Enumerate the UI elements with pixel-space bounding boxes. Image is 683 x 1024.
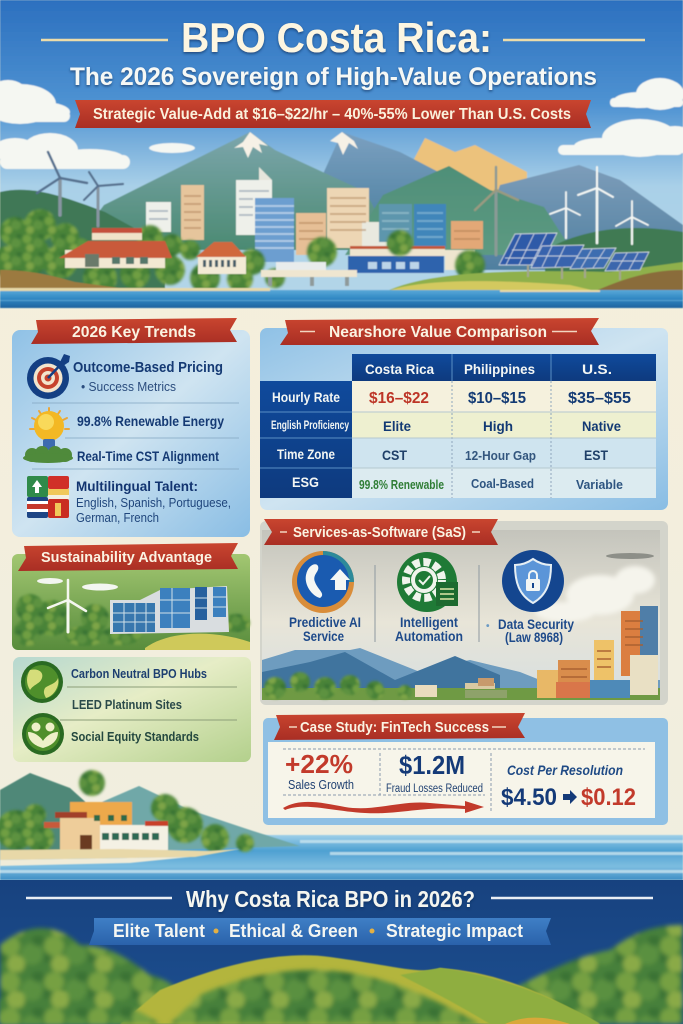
icon: green globe xyxy=(21,661,63,703)
heading: case study: Case Study: FinTech Success xyxy=(300,719,489,736)
icon: light bulb xyxy=(23,408,73,463)
row: english proficiency xyxy=(383,418,621,434)
row: time zone: 12-Hour Gap xyxy=(465,448,536,463)
arrow: growth xyxy=(283,801,484,813)
wind turbines xyxy=(37,152,648,255)
label: intelligent automation: Intelligent xyxy=(400,614,458,630)
column headers: U.S. xyxy=(582,361,612,377)
item: carbon neutral: Carbon Neutral BPO Hubs xyxy=(71,666,207,681)
row: time zone: CST xyxy=(382,447,407,463)
item: multilingual talent xyxy=(76,478,231,525)
scene: mountains and city xyxy=(262,606,660,700)
subtitle: The 2026 Sovereign of High-Value Operations xyxy=(70,63,597,91)
icon: target xyxy=(27,354,70,399)
header landscape illustration xyxy=(0,0,683,308)
heading: case study xyxy=(274,713,525,740)
label: data security: (Law 8968) xyxy=(505,629,563,645)
stat: sales growth: +22% xyxy=(285,749,353,779)
banner: value proposition: Strategic Value-Add at $16–$22/hr – 40%-55% Lower Than U.S. Costs xyxy=(93,106,571,123)
row: english proficiency: Elite xyxy=(383,418,411,434)
icon: intelligent automation xyxy=(397,552,458,612)
row headers: Hourly Rate xyxy=(272,389,340,405)
label: predictive AI service: Predictive AI xyxy=(289,614,361,630)
panel: nearshore value comparison xyxy=(260,318,668,510)
stat: cost per resolution: Cost Per Resolution xyxy=(507,762,623,778)
row: hourly rate: $35–$55 xyxy=(568,390,631,407)
stat: cost per resolution xyxy=(501,762,636,811)
item: renewable energy: 99.8% Renewable Energy xyxy=(77,413,224,429)
stat: fraud losses xyxy=(386,750,483,795)
icon: social equity xyxy=(22,713,64,755)
item: CST alignment: Real-Time CST Alignment xyxy=(77,448,219,464)
panel: 2026 key trends xyxy=(12,318,250,537)
comparison table xyxy=(260,354,656,498)
item: outcome-based pricing: • Success Metrics xyxy=(81,379,176,394)
row: ESG: 99.8% Renewable xyxy=(359,478,444,492)
row: hourly rate: $10–$15 xyxy=(468,390,526,407)
office building xyxy=(110,586,229,634)
panel: case study xyxy=(263,713,668,825)
icon: predictive AI xyxy=(292,551,354,613)
row: hourly rate: $16–$22 xyxy=(369,390,429,407)
row headers: Time Zone xyxy=(277,446,335,462)
heading: 2026 key trends: 2026 Key Trends xyxy=(72,324,196,341)
panel: services-as-software xyxy=(260,519,668,705)
icon: language flags xyxy=(27,476,69,518)
panel: sustainability list xyxy=(13,657,251,762)
item: social equity: Social Equity Standards xyxy=(71,729,199,744)
label: data security: Data Security xyxy=(498,616,574,632)
stat: sales growth xyxy=(285,749,354,792)
item: outcome-based pricing xyxy=(73,359,223,394)
footer band xyxy=(0,880,683,1024)
results card xyxy=(268,742,655,818)
green hill and rocks xyxy=(385,262,683,294)
heading: sustainability advantage xyxy=(18,543,238,571)
stat: sales growth: Sales Growth xyxy=(288,777,354,792)
icon: data security shield xyxy=(502,550,564,612)
footer banner: Ethical & Green xyxy=(229,921,358,941)
item: multilingual talent: Multilingual Talent: xyxy=(76,478,198,494)
mountains xyxy=(385,138,527,215)
column headers xyxy=(365,361,612,377)
footer landscape xyxy=(0,925,683,1024)
label: intelligent automation: Automation xyxy=(395,628,463,644)
column headers: Philippines xyxy=(464,361,535,377)
heading: 2026 key trends xyxy=(31,318,237,344)
trees xyxy=(0,209,485,295)
ocean xyxy=(0,835,683,880)
heading: nearshore value comparison: Nearshore Value Comparison xyxy=(329,324,547,341)
icon: turbine xyxy=(48,580,86,632)
item: outcome-based pricing: Outcome-Based Pricing xyxy=(73,359,223,376)
row: time zone: EST xyxy=(584,447,608,463)
stat: fraud losses: Fraud Losses Reduced xyxy=(386,783,483,795)
item: multilingual talent: German, French xyxy=(76,511,159,525)
solar panels xyxy=(499,233,649,280)
heading: services-as-software: Services-as-Software (SaS) xyxy=(293,524,466,541)
title: BPO Costa Rica: xyxy=(181,14,492,61)
label: data security: • xyxy=(486,621,490,632)
row: time zone xyxy=(382,447,608,463)
banner: value proposition xyxy=(75,100,591,128)
item: LEED platinum: LEED Platinum Sites xyxy=(72,697,182,712)
heading: nearshore value comparison xyxy=(280,318,599,345)
footer banner: Strategic Impact xyxy=(386,921,523,941)
row headers: English Proficiency xyxy=(271,418,349,432)
stat: cost per resolution: $0.12 xyxy=(581,784,636,811)
heading: services-as-software xyxy=(264,519,498,545)
label: predictive AI service xyxy=(289,614,361,644)
label: data security xyxy=(486,616,574,645)
row headers xyxy=(271,389,349,490)
row: ESG xyxy=(359,477,623,492)
row headers: ESG xyxy=(292,474,319,490)
footer banner xyxy=(89,918,551,945)
water xyxy=(0,290,683,308)
buildings xyxy=(146,167,483,273)
stat: cost per resolution: $4.50 xyxy=(501,784,557,811)
footer heading: Why Costa Rica BPO in 2026? xyxy=(186,886,475,912)
left forest hills xyxy=(0,190,165,290)
stat: fraud losses: $1.2M xyxy=(399,750,465,780)
row: ESG: Coal-Based xyxy=(471,477,534,491)
footer banner: Elite Talent xyxy=(113,921,205,941)
row: english proficiency: Native xyxy=(582,418,621,434)
panel: sustainability scene xyxy=(12,543,250,650)
row: hourly rate xyxy=(369,390,631,407)
row: ESG: Variable xyxy=(576,478,623,492)
label: predictive AI service: Service xyxy=(303,628,344,644)
column headers: Costa Rica xyxy=(365,361,434,377)
island illustration xyxy=(0,770,300,866)
house buildings xyxy=(59,228,357,286)
item: multilingual talent: English, Spanish, Portuguese, xyxy=(76,496,231,510)
label: intelligent automation xyxy=(395,614,463,644)
row: english proficiency: High xyxy=(483,418,513,434)
heading: sustainability advantage: Sustainability Advantage xyxy=(41,549,212,566)
